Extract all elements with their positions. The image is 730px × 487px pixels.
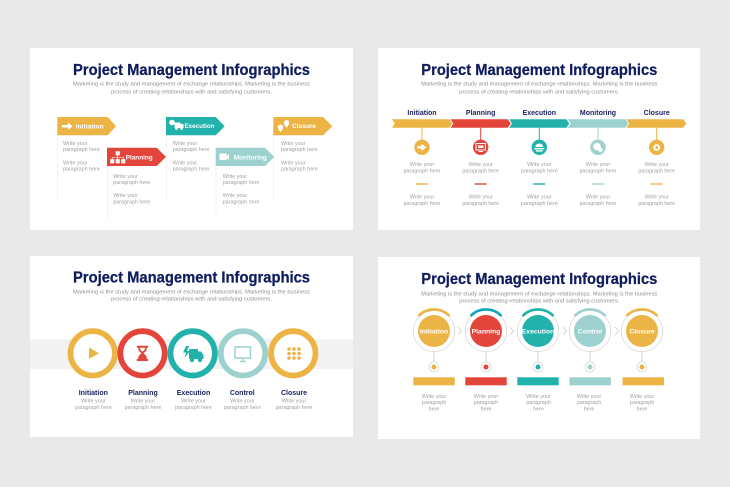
- subtitle: Marketing is the study and management of exchange relationships. Marketing is the business: [421, 82, 657, 88]
- title: Project Management Infographics: [73, 270, 310, 286]
- step: Monitoring: Write your: [586, 195, 610, 201]
- step: Closure: paragraph: [630, 400, 654, 406]
- step: Planning: Write your: [468, 195, 493, 201]
- step: Closure: here: [637, 407, 647, 413]
- text: Planning paragraphs: Write your: [113, 174, 138, 180]
- caption: Control: Write your: [230, 398, 255, 404]
- icon: delivery truck: [169, 120, 184, 130]
- text: Monitoring paragraphs: paragraph here: [223, 199, 260, 205]
- text: Initiation paragraphs: paragraph here: [63, 167, 100, 173]
- subtitle: process of creating relationships with and satisfying customers.: [111, 297, 272, 303]
- step: Control: paragraph: [577, 400, 601, 406]
- caption: Initiation: paragraph here: [75, 405, 112, 411]
- icon: hourglass: [137, 346, 148, 361]
- ring: Execution: [170, 331, 215, 375]
- caption: Control: [224, 390, 261, 411]
- step: Initiation: here: [429, 407, 439, 413]
- step: Closure: paragraph here: [638, 169, 675, 175]
- step: Planning: [462, 128, 499, 207]
- step: Closure: Closure: [629, 328, 655, 336]
- text: Initiation paragraphs: Write your: [63, 160, 88, 166]
- icon: delivery truck: [183, 346, 204, 362]
- step: Closure: Write your: [644, 162, 669, 168]
- caption: Initiation: [75, 390, 112, 411]
- text: Monitoring paragraphs: Write your: [223, 193, 247, 199]
- step: Closure: [621, 309, 664, 413]
- title: Project Management Infographics: [421, 271, 657, 288]
- step: Initiation: Write your: [422, 394, 446, 400]
- arrows between steps: [458, 327, 618, 335]
- caption: Execution: paragraph here: [175, 405, 212, 411]
- panel: staggered flags: [30, 48, 353, 230]
- step: Initiation: [413, 309, 455, 413]
- step: Execution: [517, 309, 559, 413]
- subtitle: Marketing is the study and management of exchange relationships. Marketing is the business: [421, 291, 657, 297]
- title: Project Management Infographics: [73, 62, 310, 79]
- step labels: Execution: [523, 110, 556, 117]
- step: Planning: here: [481, 407, 491, 413]
- icon: map pins: [278, 120, 289, 132]
- icon: play: [89, 348, 99, 359]
- icon: video camera: [220, 154, 229, 160]
- text: Closure paragraphs: Write your: [281, 160, 306, 166]
- caption: Closure: Write your: [282, 398, 306, 404]
- text: Planning paragraphs: Write your: [113, 193, 138, 199]
- step: Execution: Execution: [522, 328, 554, 336]
- panel: ring row: [30, 256, 353, 437]
- step: Execution: paragraph here: [521, 201, 558, 207]
- caption: Control: Control: [230, 390, 255, 397]
- step: Control: Control: [578, 328, 602, 336]
- ring: Initiation: [70, 331, 115, 375]
- flag: Initiation: Initiation: [76, 123, 104, 130]
- subtitle: Marketing is the study and management of exchange relationships. Marketing is the business: [73, 289, 310, 295]
- text: Initiation paragraphs: Write your: [63, 141, 88, 147]
- step: Planning: paragraph here: [462, 169, 499, 175]
- step labels: Closure: [644, 110, 670, 117]
- caption: Control: paragraph here: [224, 405, 261, 411]
- step: Closure: Write your: [630, 394, 654, 400]
- caption: Initiation: Initiation: [79, 390, 108, 397]
- step: Initiation: paragraph here: [404, 201, 440, 207]
- step: Initiation: Write your: [410, 195, 434, 201]
- ring: Control: [221, 331, 265, 375]
- step: Initiation: Initiation: [420, 328, 448, 336]
- text: Closure paragraphs: paragraph here: [281, 167, 318, 173]
- caption: Execution: Write your: [181, 398, 206, 404]
- icon: arrow: [62, 122, 72, 130]
- text: Closure paragraphs: paragraph here: [281, 147, 318, 153]
- step: Execution: Write your: [527, 195, 552, 201]
- text: Execution paragraphs: Write your: [173, 160, 197, 166]
- step: Planning: paragraph: [474, 400, 498, 406]
- text: Execution paragraphs: paragraph here: [173, 147, 210, 153]
- step: Monitoring: Write your: [586, 162, 610, 168]
- step: Closure: paragraph here: [638, 201, 675, 207]
- caption: Closure: [276, 390, 312, 411]
- subtitle: process of creating relationships with and satisfying customers.: [459, 299, 620, 305]
- text: Initiation paragraphs: paragraph here: [63, 147, 100, 153]
- flag: Closure: [273, 117, 332, 135]
- step: Initiation: paragraph here: [404, 169, 440, 175]
- caption: Planning: paragraph here: [125, 405, 161, 411]
- step: Execution: [521, 128, 558, 207]
- title: Project Management Infographics: [421, 62, 657, 79]
- step labels: [407, 110, 670, 117]
- subtitle: Marketing is the study and management of exchange relationships. Marketing is the business: [73, 82, 310, 88]
- chevron bar: [392, 119, 686, 128]
- icon: org chart: [110, 152, 125, 163]
- caption: Closure: Closure: [281, 390, 307, 397]
- step: Execution: here: [533, 407, 544, 413]
- step: Planning: Planning: [472, 328, 500, 336]
- text: Execution paragraphs: Write your: [173, 141, 197, 147]
- flag: Closure: Closure: [292, 123, 316, 130]
- step: Planning: Write your: [468, 162, 493, 168]
- ring: Planning: [120, 331, 165, 375]
- step: Execution: Write your: [527, 162, 552, 168]
- caption: Initiation: Write your: [81, 398, 106, 404]
- caption: Execution: [175, 390, 212, 411]
- step: Control: [569, 309, 611, 413]
- icon: dot grid: [287, 347, 301, 360]
- text: Closure paragraphs: Write your: [281, 141, 306, 147]
- caption: Planning: Planning: [128, 390, 158, 397]
- step labels: Initiation: [407, 110, 437, 117]
- caption: Planning: [125, 390, 161, 411]
- ring: Closure: [271, 331, 315, 375]
- text: Planning paragraphs: paragraph here: [113, 199, 150, 205]
- step: Monitoring: paragraph here: [580, 201, 616, 207]
- flag: Execution: [166, 117, 225, 135]
- text: Monitoring paragraphs: paragraph here: [223, 180, 260, 186]
- text: Planning paragraphs: paragraph here: [113, 180, 150, 186]
- step: Planning: Write your: [474, 394, 498, 400]
- step: Execution: Write your: [526, 394, 551, 400]
- text: Monitoring paragraphs: Write your: [223, 174, 247, 180]
- icon: monitor: [235, 347, 250, 362]
- step: Planning: [465, 309, 507, 413]
- step: Initiation: [404, 128, 440, 207]
- step: Execution: paragraph here: [521, 169, 558, 175]
- step: Initiation: paragraph: [422, 400, 446, 406]
- step: Monitoring: paragraph here: [580, 169, 616, 175]
- step: Control: Write your: [577, 394, 601, 400]
- caption: Planning: Write your: [131, 398, 155, 404]
- caption: Closure: paragraph here: [276, 405, 312, 411]
- step: Closure: [638, 128, 675, 207]
- step labels: Planning: [466, 110, 495, 117]
- step: Control: here: [584, 407, 594, 413]
- flag: Monitoring: [216, 148, 274, 166]
- flag: Planning: [107, 148, 166, 166]
- subtitle: process of creating relationships with and satisfying customers.: [111, 89, 272, 95]
- text: Execution paragraphs: paragraph here: [173, 167, 210, 173]
- flag: Initiation: [57, 117, 116, 135]
- caption: Execution: Execution: [177, 390, 210, 397]
- step: Initiation: Write your: [410, 162, 434, 168]
- panel: circle process: [378, 257, 700, 439]
- step: Execution: paragraph: [526, 400, 551, 406]
- step: Monitoring: [580, 128, 616, 207]
- flag: Monitoring: Monitoring: [234, 154, 267, 161]
- step: Planning: paragraph here: [462, 201, 499, 207]
- step: Closure: Write your: [644, 195, 669, 201]
- flag: Planning: Planning: [126, 154, 153, 161]
- panel: chevron timeline: [378, 48, 700, 230]
- flag: Execution: Execution: [184, 123, 214, 130]
- step labels: Monitoring: [580, 110, 616, 117]
- subtitle: process of creating relationships with and satisfying customers.: [459, 89, 620, 95]
